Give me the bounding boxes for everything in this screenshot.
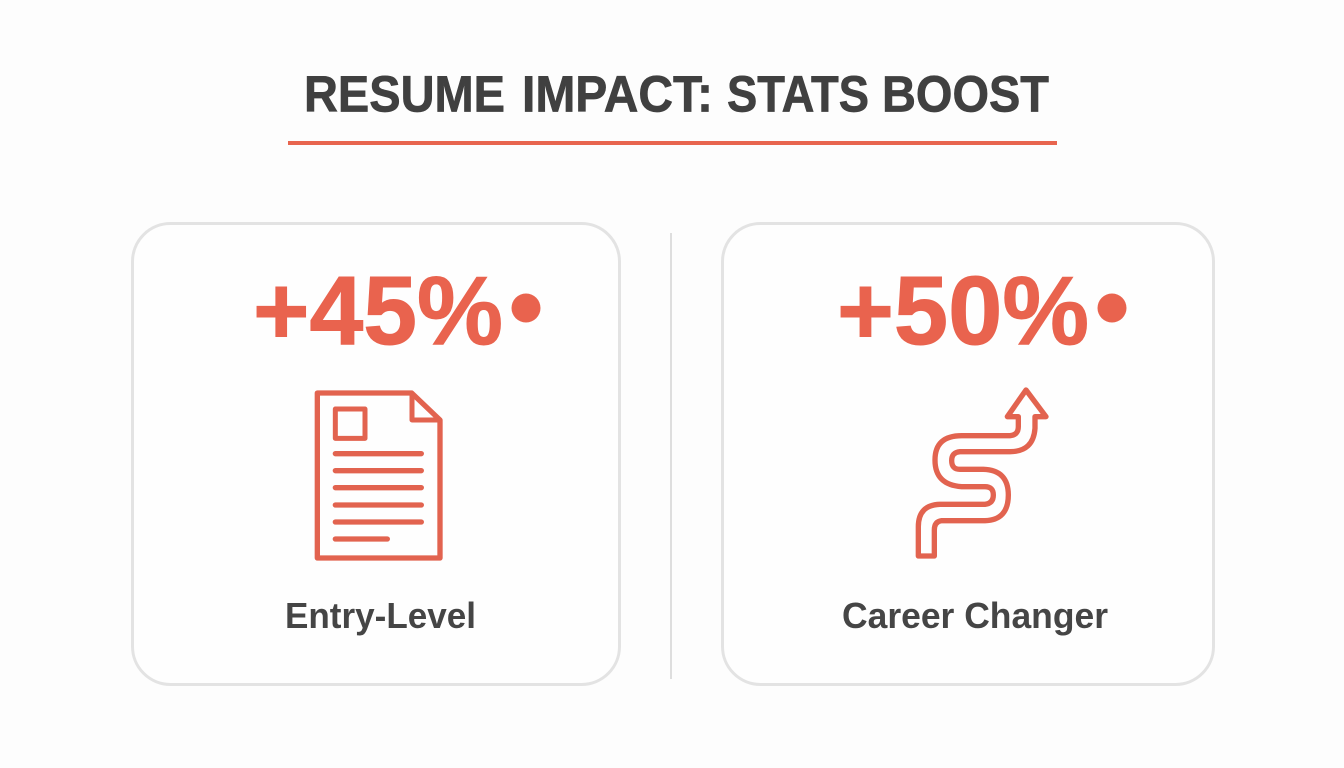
card outline: career changer	[722, 224, 1214, 684]
stat: +50%: +50%	[837, 256, 1089, 365]
label: entry-level: Entry-Level	[285, 595, 476, 636]
divider	[670, 233, 672, 679]
bullet dot: entry-level	[512, 294, 540, 322]
icon: resume document	[317, 393, 440, 558]
card outline: entry-level	[132, 224, 620, 684]
title: BOOST	[882, 66, 1049, 122]
panel: entry-level	[132, 224, 620, 684]
icon: winding arrow	[918, 390, 1046, 556]
bullet dot: career changer	[1098, 294, 1126, 322]
title	[304, 66, 1049, 122]
title underline	[288, 141, 1057, 145]
title: IMPACT:	[522, 66, 713, 122]
title: RESUME	[304, 66, 505, 122]
label: career changer: Career Changer	[842, 595, 1108, 636]
stat: +45%: +45%	[253, 256, 503, 365]
title: STATS	[727, 66, 869, 122]
panel: career changer	[722, 224, 1214, 684]
